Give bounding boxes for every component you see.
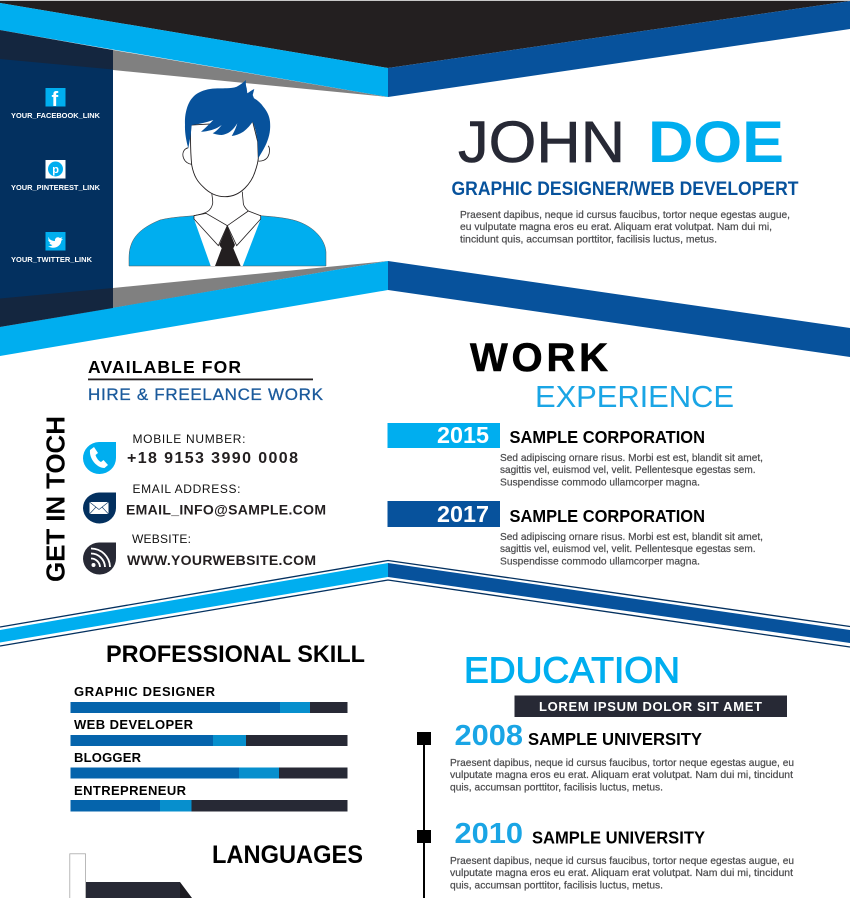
employer: SAMPLE CORPORATION — [510, 506, 705, 526]
last name: DOE — [648, 110, 784, 175]
intro paragraph: Praesent dapibus, neque id cursus faucibus, tortor neque egestas augue, — [460, 209, 790, 221]
neck — [194, 192, 261, 226]
pinterest link: YOUR_PINTEREST_LINK — [11, 183, 101, 192]
work heading — [470, 336, 734, 414]
job description — [500, 531, 763, 568]
degree description — [450, 855, 794, 892]
skill: entrepreneur — [70, 783, 348, 812]
job entry 2017 — [388, 501, 763, 568]
skill: web developer: WEB DEVELOPER — [74, 717, 194, 732]
name — [458, 110, 784, 175]
website value: WWW.YOURWEBSITE.COM — [127, 552, 316, 568]
job description — [500, 452, 763, 488]
languages chart fragment — [70, 854, 192, 898]
ears — [183, 146, 270, 164]
education heading: EDUCATION — [464, 650, 680, 690]
skill: entrepreneur: ENTREPRENEUR — [74, 783, 187, 798]
email label: EMAIL ADDRESS: — [132, 482, 240, 496]
degree description: quis, accumsan porttitor, facilisis luctus, metus. — [450, 782, 663, 794]
contact: mobile — [83, 432, 298, 474]
website label: WEBSITE: — [132, 532, 191, 546]
intro paragraph: tincidunt quis, accumsan porttitor, facilisis luctus, metus. — [460, 234, 717, 246]
job title: GRAPHIC DESIGNER/WEB DEVELOPERT — [452, 178, 799, 200]
skill: blogger: BLOGGER — [74, 750, 142, 765]
icon: envelope — [83, 492, 116, 523]
header banner — [0, 0, 850, 357]
education entry 2010 — [450, 818, 794, 892]
intro paragraph: eu vulputate magna eros eu erat. Aliquam erat volutpat. Nam dui mi, — [460, 221, 772, 233]
mobile label: MOBILE NUMBER: — [132, 432, 246, 446]
icon: pinterest — [46, 160, 66, 178]
year 2008: 2008 — [454, 720, 523, 752]
university: SAMPLE UNIVERSITY — [528, 729, 702, 749]
twitter link: YOUR_TWITTER_LINK — [11, 255, 93, 264]
languages heading: LANGUAGES — [212, 841, 363, 869]
intro paragraph — [460, 209, 790, 246]
year 2015: 2015 — [437, 422, 489, 448]
degree description: quis, accumsan porttitor, facilisis luctus, metus. — [450, 880, 663, 892]
employer: SAMPLE CORPORATION — [510, 427, 705, 447]
skill: blogger — [70, 750, 348, 778]
year 2017: 2017 — [437, 501, 489, 527]
icon: facebook: f — [52, 89, 58, 111]
facebook link: YOUR_FACEBOOK_LINK — [11, 111, 101, 120]
first name: JOHN — [458, 110, 625, 175]
skill: web developer — [70, 717, 348, 746]
skill: graphic designer — [70, 684, 348, 713]
job description: Sed adipiscing ornare risus. Morbi est est, blandit sit amet, — [500, 452, 763, 464]
hair — [185, 80, 270, 158]
degree description: Praesent dapibus, neque id cursus faucibus, tortor neque egestas augue, eu — [450, 855, 794, 867]
panel: social sidebar — [0, 30, 113, 327]
degree description — [450, 757, 794, 794]
job description: Suspendisse commodo ullamcorper magna. — [500, 476, 700, 488]
professional skill heading: PROFESSIONAL SKILL — [106, 641, 365, 668]
job description: sagittis vel, euismod vel, velit. Pellentesque egestas sem. — [500, 543, 756, 555]
mid divider chevron — [0, 560, 850, 647]
face — [191, 122, 258, 197]
tie — [215, 226, 241, 266]
mobile value: +18 9153 3990 0008 — [127, 450, 298, 467]
skill: graphic designer: GRAPHIC DESIGNER — [74, 684, 216, 699]
experience title: EXPERIENCE — [535, 379, 734, 414]
portrait illustration — [129, 80, 326, 266]
icon: twitter — [46, 232, 66, 250]
icon: pinterest: p — [52, 164, 59, 176]
education subtitle bar — [514, 696, 787, 717]
education entry 2008 — [450, 720, 794, 794]
job description: Sed adipiscing ornare risus. Morbi est est, blandit sit amet, — [500, 531, 763, 543]
job entry 2015 — [388, 422, 763, 488]
job description: sagittis vel, euismod vel, velit. Pellentesque egestas sem. — [500, 464, 756, 476]
timeline — [417, 732, 431, 898]
availability block — [88, 357, 324, 404]
icon: facebook — [46, 88, 66, 111]
year 2010: 2010 — [454, 818, 523, 850]
skills chart — [70, 684, 348, 812]
degree description: vulputate magna eros eu erat. Aliquam erat volutpat. Nam dui mi, tincidunt — [450, 769, 793, 781]
education subtitle bar: LOREM IPSUM DOLOR SIT AMET — [539, 699, 762, 714]
email value: EMAIL_INFO@SAMPLE.COM — [126, 502, 326, 518]
job description: Suspendisse commodo ullamcorper magna. — [500, 556, 700, 568]
availability subheading: HIRE & FREELANCE WORK — [88, 385, 324, 404]
degree description: Praesent dapibus, neque id cursus faucibus, tortor neque egestas augue, eu — [450, 757, 794, 769]
icon: phone — [83, 442, 116, 474]
university: SAMPLE UNIVERSITY — [532, 828, 705, 848]
sweater — [129, 216, 326, 266]
collar — [194, 211, 261, 246]
contact: email — [83, 482, 326, 523]
contact: website — [83, 532, 316, 574]
degree description: vulputate magna eros eu erat. Aliquam erat volutpat. Nam dui mi, tincidunt — [450, 867, 793, 879]
availability heading: AVAILABLE FOR — [88, 357, 241, 377]
get in touch heading: GET IN TOCH — [40, 416, 70, 582]
icon: rss — [83, 542, 116, 574]
shirt — [194, 219, 261, 266]
work title: WORK — [470, 336, 608, 380]
